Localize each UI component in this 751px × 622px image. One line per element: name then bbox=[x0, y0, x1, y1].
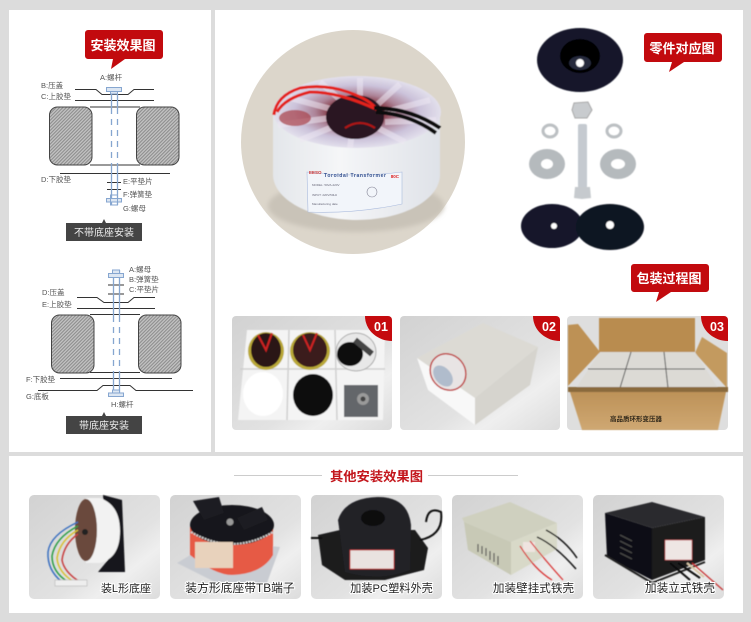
part labels bbox=[41, 72, 153, 213]
photo: packaging step 02 bbox=[400, 316, 560, 430]
part labels: F:弹簧垫 bbox=[123, 189, 153, 199]
part labels: E:平垫片 bbox=[123, 176, 153, 186]
caption: 装方形底座带TB端子 bbox=[185, 581, 295, 595]
badge 01 bbox=[365, 316, 392, 341]
card: square base with TB terminal bbox=[170, 495, 301, 599]
badge 03: 03 bbox=[710, 320, 724, 334]
callout: installation effect bbox=[85, 30, 163, 69]
part labels: A:螺母 bbox=[129, 264, 152, 274]
photo: packaging step 03 bbox=[567, 316, 728, 430]
badge 02: 02 bbox=[542, 320, 556, 334]
part labels: F:下胶垫 bbox=[26, 374, 56, 384]
rubber pads bbox=[521, 204, 644, 250]
bolt bbox=[108, 270, 124, 396]
core sections bbox=[52, 315, 181, 373]
product label bbox=[307, 170, 402, 212]
badge 01: 01 bbox=[374, 320, 388, 334]
label: with base bbox=[66, 412, 142, 434]
diagram: without base bbox=[41, 72, 179, 213]
photo: parts bbox=[521, 28, 644, 250]
top rubber cap bbox=[537, 28, 623, 92]
part labels: D:压盖 bbox=[42, 287, 65, 297]
label: without base bbox=[66, 219, 142, 241]
core sections bbox=[50, 107, 179, 165]
product label: Toroidal Transformer bbox=[324, 173, 386, 179]
caption: 加装PC塑料外壳 bbox=[350, 581, 433, 595]
panel: product and packaging bbox=[215, 10, 743, 452]
product label: Manufacturing date bbox=[312, 202, 338, 206]
caption: 加装壁挂式铁壳 bbox=[493, 581, 574, 595]
photo: toroidal transformer bbox=[241, 30, 465, 254]
callout: packaging: 包装过程图 bbox=[636, 271, 702, 286]
diagram: with base bbox=[26, 264, 193, 409]
product label: 80C bbox=[391, 174, 400, 179]
panel: other installation effects bbox=[9, 456, 743, 613]
flat washers bbox=[529, 149, 636, 179]
spring washers bbox=[543, 125, 621, 137]
callout: packaging bbox=[631, 264, 709, 302]
part labels: C:上胶垫 bbox=[41, 91, 71, 101]
product label: INPUT: 220V/50Hz bbox=[312, 193, 338, 197]
part labels: H:螺杆 bbox=[111, 399, 134, 409]
caption: 装L形底座 bbox=[101, 581, 151, 595]
bolt bbox=[106, 88, 122, 205]
part labels: C:平垫片 bbox=[129, 284, 159, 294]
callout: parts: 零件对应图 bbox=[649, 41, 715, 56]
label: without base: 不带底座安装 bbox=[74, 226, 134, 239]
card: L bracket bbox=[29, 495, 160, 599]
product label: EESO bbox=[309, 170, 322, 175]
part labels: G:螺母 bbox=[123, 203, 146, 213]
badge 02 bbox=[533, 316, 560, 341]
card: PC plastic case bbox=[311, 495, 442, 599]
part labels: G:底板 bbox=[26, 391, 49, 401]
panel: installation diagrams bbox=[9, 10, 211, 452]
badge 03 bbox=[701, 316, 728, 341]
heading: 其他安装效果图 bbox=[330, 468, 423, 484]
carton print: 高品质环形变压器 bbox=[610, 414, 662, 423]
part labels: B:压盖 bbox=[41, 80, 64, 90]
card: wall-mounted iron case bbox=[452, 495, 583, 599]
bolt bbox=[574, 124, 591, 199]
part labels bbox=[26, 264, 159, 409]
product label: MODEL: 50VA-220V bbox=[312, 183, 339, 187]
caption: 加装立式铁壳 bbox=[645, 581, 715, 595]
part labels: D:下胶垫 bbox=[41, 174, 71, 184]
part labels: B:弹簧垫 bbox=[129, 274, 159, 284]
label: with base: 带底座安装 bbox=[79, 419, 129, 432]
card: vertical iron case bbox=[593, 495, 724, 599]
photo: packaging step 01 bbox=[232, 316, 392, 430]
callout: parts bbox=[644, 33, 722, 72]
nut bbox=[572, 102, 592, 118]
callout: installation effect: 安装效果图 bbox=[90, 38, 156, 53]
part labels: E:上胶垫 bbox=[42, 299, 72, 309]
part labels: A:螺杆 bbox=[100, 72, 123, 82]
